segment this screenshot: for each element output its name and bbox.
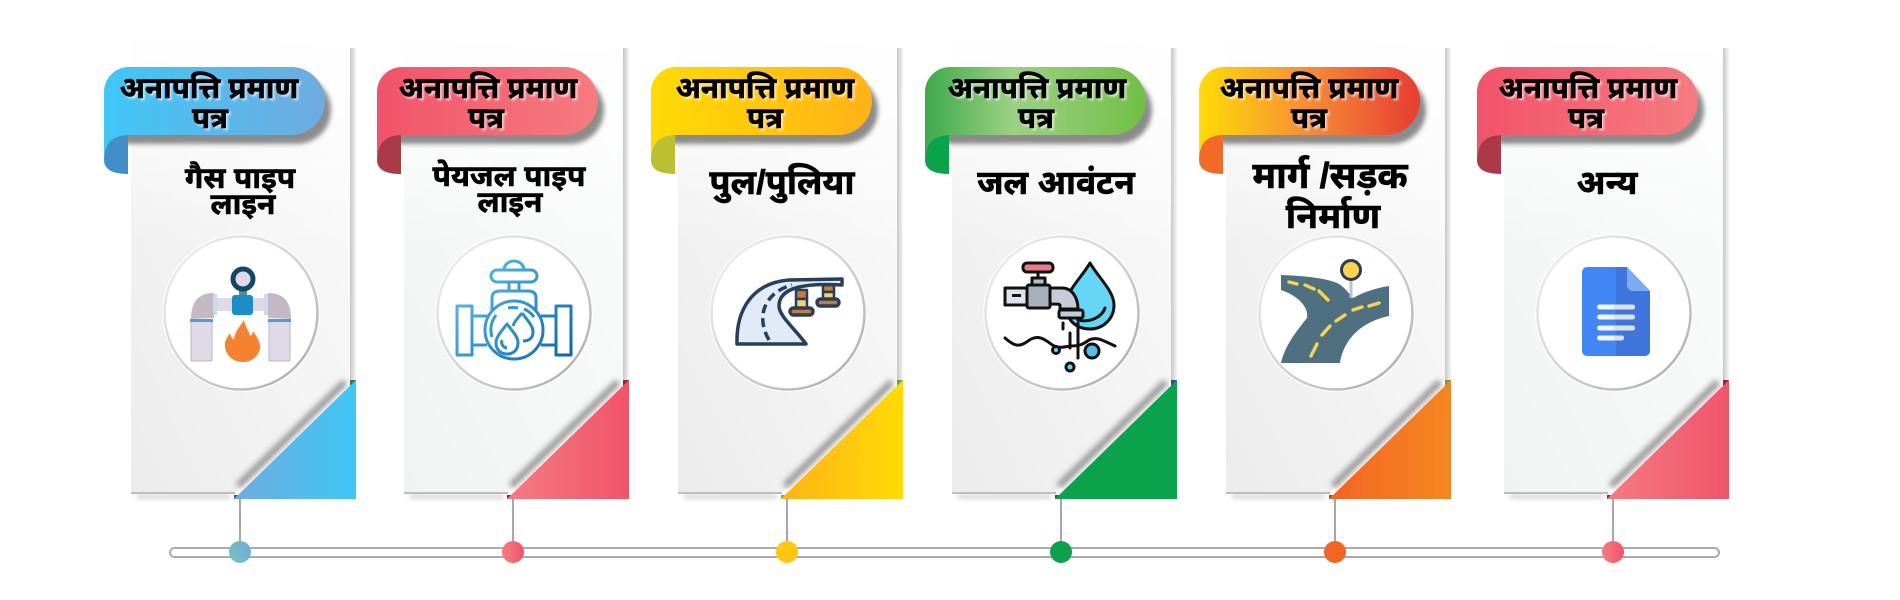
icon circle	[162, 234, 320, 392]
connector and timeline dot	[1050, 499, 1072, 563]
subtitle: लाइन	[210, 188, 276, 221]
panel: road construction	[1199, 40, 1451, 563]
subtitle: लाइन	[477, 186, 543, 219]
ribbon heading: अनापत्ति प्रमाण	[399, 72, 578, 105]
corner triangle	[507, 380, 629, 499]
icon circle	[983, 234, 1141, 392]
icon: pipes with flame	[190, 269, 291, 362]
icon: bridge road	[737, 279, 842, 344]
corner triangle	[781, 380, 903, 499]
ribbon heading: पत्र	[192, 102, 229, 135]
card body	[1504, 40, 1729, 499]
subtitle: मार्ग /सड़क	[1252, 155, 1408, 196]
connector and timeline dot	[1602, 499, 1624, 563]
corner triangle	[1607, 380, 1729, 499]
icon circle	[435, 234, 593, 392]
ribbon heading: अनापत्ति प्रमाण	[948, 72, 1127, 105]
connector and timeline dot	[229, 499, 251, 563]
icon circle	[709, 234, 867, 392]
ribbon heading: अनापत्ति प्रमाण	[676, 72, 855, 105]
ribbon heading: अनापत्ति प्रमाण	[1499, 72, 1678, 105]
icon: water valve	[457, 261, 571, 359]
panel: bridge and culvert	[651, 40, 903, 563]
icon circle	[1257, 234, 1415, 392]
icon: forked road with pin	[1281, 260, 1389, 363]
ribbon heading	[1477, 67, 1704, 174]
timeline track	[170, 548, 1719, 557]
card body	[678, 40, 903, 499]
subtitle: जल आवंटन	[977, 165, 1136, 202]
subtitle	[185, 160, 296, 221]
subtitle	[1252, 155, 1408, 236]
panel: other	[1477, 40, 1729, 563]
card body	[952, 40, 1177, 499]
card body	[404, 40, 629, 499]
subtitle	[433, 158, 586, 219]
card body	[131, 40, 356, 499]
ribbon heading	[377, 67, 604, 174]
card body	[1226, 40, 1451, 499]
subtitle: पेयजल पाइप	[433, 158, 586, 193]
panel: water allocation	[925, 40, 1177, 563]
connector and timeline dot	[776, 499, 798, 563]
ribbon heading: पत्र	[747, 102, 784, 135]
ribbon heading	[651, 67, 878, 174]
ribbon heading	[104, 67, 331, 174]
icon: tap and water drop	[1005, 263, 1115, 371]
panel: gas pipeline	[104, 40, 356, 563]
corner triangle	[1329, 380, 1451, 499]
ribbon heading: अनापत्ति प्रमाण	[120, 72, 299, 105]
subtitle: अन्य	[1576, 164, 1639, 202]
ribbon heading	[925, 67, 1152, 174]
corner triangle	[234, 380, 356, 499]
icon circle	[1535, 234, 1693, 392]
ribbon heading: पत्र	[1291, 102, 1328, 135]
ribbon heading: पत्र	[1568, 102, 1605, 135]
ribbon heading	[1199, 67, 1426, 174]
subtitle: पुल/पुलिया	[709, 162, 855, 204]
ribbon heading: अनापत्ति प्रमाण	[1220, 72, 1399, 105]
ribbon heading: पत्र	[468, 102, 505, 135]
subtitle: गैस पाइप	[185, 160, 296, 195]
subtitle: निर्माण	[1286, 196, 1382, 236]
icon: document	[1582, 267, 1650, 356]
corner triangle	[1055, 380, 1177, 499]
panel: drinking water pipeline	[377, 40, 629, 563]
ribbon heading: पत्र	[1018, 102, 1055, 135]
connector and timeline dot	[502, 499, 524, 563]
connector and timeline dot	[1324, 499, 1346, 563]
